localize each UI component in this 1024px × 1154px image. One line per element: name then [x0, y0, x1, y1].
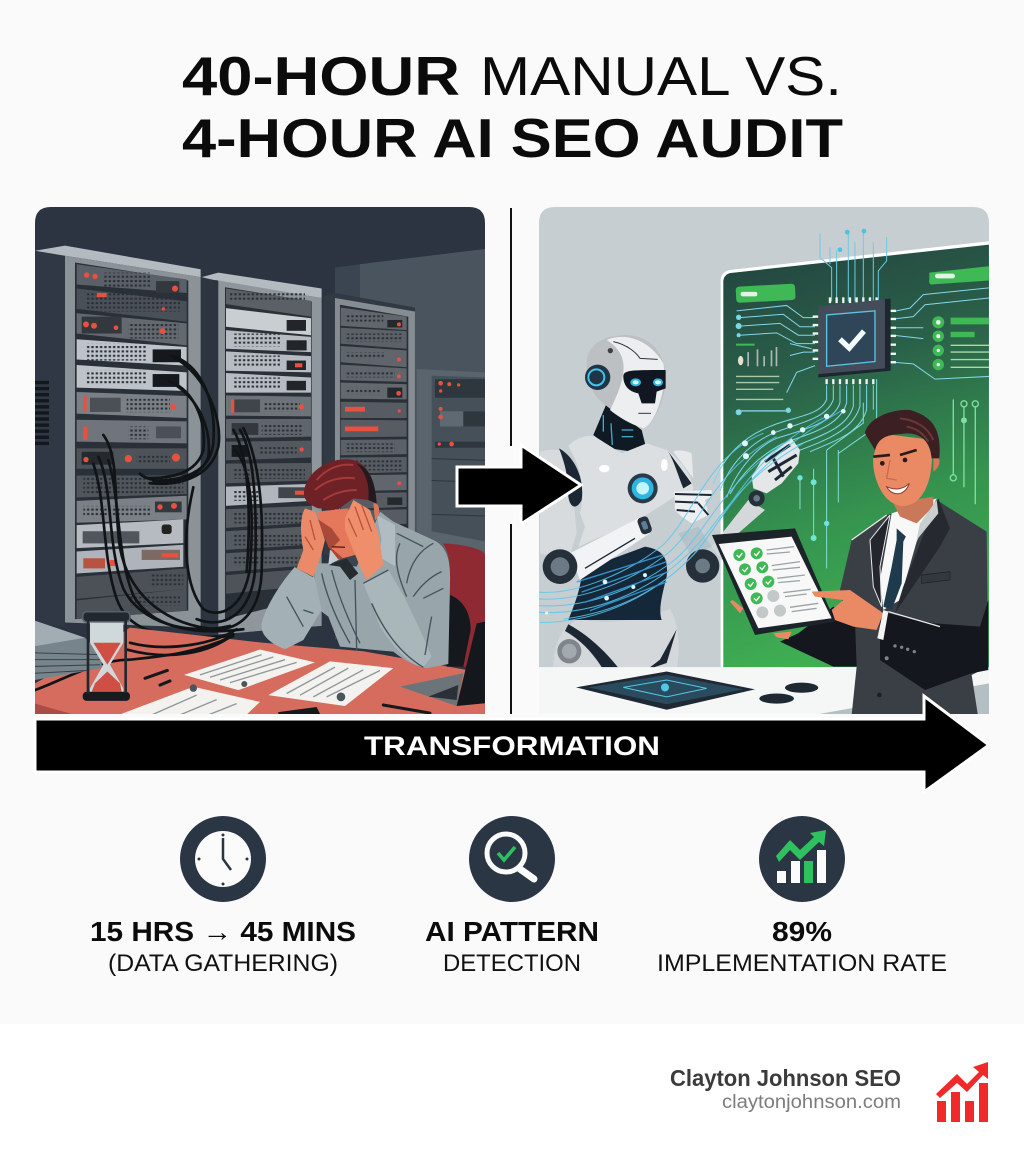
panel: AI audit workspace: [539, 207, 989, 714]
stack of folders: [35, 621, 102, 680]
stat: pattern detection: DETECTION: [443, 950, 581, 977]
icon: growth chart: [759, 816, 845, 902]
title: MANUAL VS.: [480, 45, 842, 107]
smiling businessman: [712, 410, 988, 728]
arrow: transformation: TRANSFORMATION: [364, 731, 660, 761]
stat: pattern detection: [425, 816, 599, 977]
stressed man at desk: [261, 459, 485, 706]
floor: [539, 667, 989, 714]
AI chip: [713, 229, 896, 497]
arrow: transformation: [35, 696, 989, 792]
arrow: manual to AI: [457, 445, 581, 524]
stat: data gathering: 15 HRS → 45 MINS: [90, 916, 356, 947]
paper sheets: [121, 650, 394, 714]
footer branding: Clayton Johnson SEO: [670, 1065, 901, 1091]
data stream sparks: [545, 409, 846, 615]
small tablet on desk: [576, 672, 818, 710]
desk cables: [35, 629, 237, 690]
footer branding: [670, 1062, 988, 1122]
stat: implementation rate: 89%: [772, 916, 832, 947]
server rack 1: [35, 246, 201, 628]
icon: red growth logo: [936, 1062, 988, 1122]
stat: data gathering: [90, 816, 356, 977]
stat: pattern detection: AI PATTERN: [425, 916, 599, 947]
server rack 4: [416, 369, 485, 564]
tangled cables: [93, 355, 262, 637]
title: [182, 45, 843, 169]
server rack 2: [202, 273, 322, 634]
laptop: [400, 622, 485, 706]
icon: clock: [180, 816, 266, 902]
hourglass: [83, 612, 130, 701]
server rack 3: [334, 293, 415, 555]
title: 40-HOUR: [182, 45, 460, 107]
green dashboard wall: [721, 241, 989, 670]
flowing data streams: [538, 410, 843, 622]
stat: implementation rate: [657, 816, 947, 977]
stat: data gathering: (DATA GATHERING): [108, 950, 338, 977]
office chair: [443, 543, 485, 667]
footer branding: claytonjohnson.com: [722, 1092, 901, 1113]
tablet with checklist: [712, 528, 835, 635]
icon: magnifier: [469, 816, 555, 902]
divider line lower: [510, 524, 512, 714]
desk: [35, 620, 485, 714]
title: 4-HOUR AI SEO AUDIT: [182, 107, 843, 169]
panel: manual audit server room: [30, 200, 497, 734]
divider line upper: [510, 208, 512, 446]
stat: implementation rate: IMPLEMENTATION RATE: [657, 950, 947, 977]
robot hips: [553, 609, 679, 670]
robot: [540, 335, 800, 620]
